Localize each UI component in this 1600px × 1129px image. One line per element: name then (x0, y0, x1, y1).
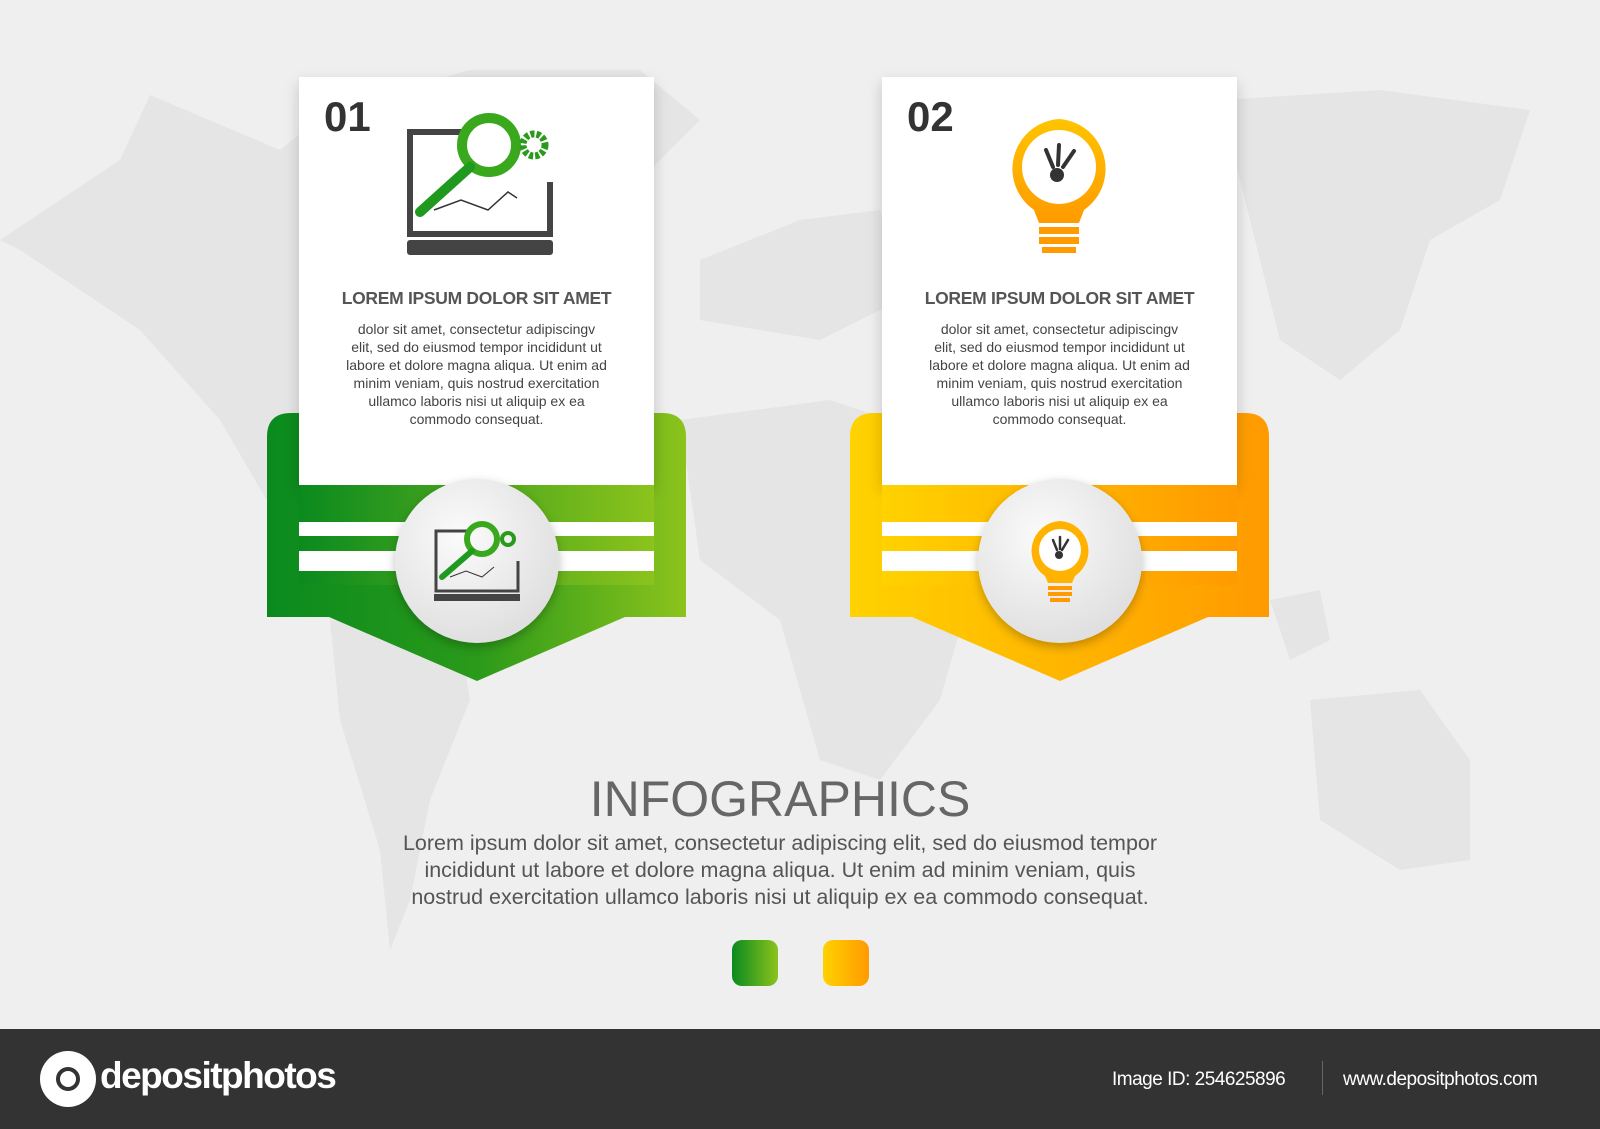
panel 2: orange (850, 76, 1269, 681)
footer: www.depositphotos.com (1343, 1069, 1537, 1090)
description: nostrud exercitation ullamco laboris nisi ut aliquip ex ea commodo consequat. (411, 885, 1149, 909)
icon: light bulb (1012, 119, 1106, 253)
text 2: minim veniam, quis nostrud exercitation (937, 375, 1182, 391)
card 2 (882, 77, 1237, 485)
card 1: 01 (324, 93, 371, 140)
heading 2: LOREM IPSUM DOLOR SIT AMET (925, 288, 1194, 308)
text 2: labore et dolore magna aliqua. Ut enim ad (929, 357, 1190, 373)
footer info: Image ID: 254625896 (1112, 1069, 1285, 1090)
text 1: commodo consequat. (410, 411, 543, 427)
footer (0, 1029, 1600, 1129)
legend squares (732, 940, 869, 986)
text 2 (929, 321, 1190, 427)
description: Lorem ipsum dolor sit amet, consectetur adipiscing elit, sed do eiusmod tempor (403, 831, 1157, 855)
heading 1: LOREM IPSUM DOLOR SIT AMET (342, 288, 611, 308)
description (403, 831, 1157, 909)
text 1 (346, 321, 607, 427)
text 2: dolor sit amet, consectetur adipiscingv (941, 321, 1178, 337)
text 2: elit, sed do eiusmod tempor incididunt ut (934, 339, 1185, 355)
text 1: labore et dolore magna aliqua. Ut enim ad (346, 357, 607, 373)
text 2: commodo consequat. (993, 411, 1126, 427)
title: INFOGRAPHICS (590, 771, 970, 827)
card 2: 02 (907, 93, 954, 140)
card 1 (299, 77, 654, 485)
panel 1: green (267, 76, 686, 681)
icon: laptop magnifier (407, 113, 553, 255)
text 1: minim veniam, quis nostrud exercitation (354, 375, 599, 391)
text 2: ullamco laboris nisi ut aliquip ex ea (951, 393, 1168, 409)
text 1: dolor sit amet, consectetur adipiscingv (358, 321, 595, 337)
icon circle 2 (978, 479, 1142, 643)
footer logo: depositphotos (100, 1055, 335, 1096)
text 1: elit, sed do eiusmod tempor incididunt ut (351, 339, 602, 355)
footer logo (40, 1051, 336, 1107)
text 1: ullamco laboris nisi ut aliquip ex ea (368, 393, 585, 409)
icon circle 1 (395, 479, 559, 643)
description: incididunt ut labore et dolore magna aliqua. Ut enim ad minim veniam, quis (424, 858, 1136, 882)
